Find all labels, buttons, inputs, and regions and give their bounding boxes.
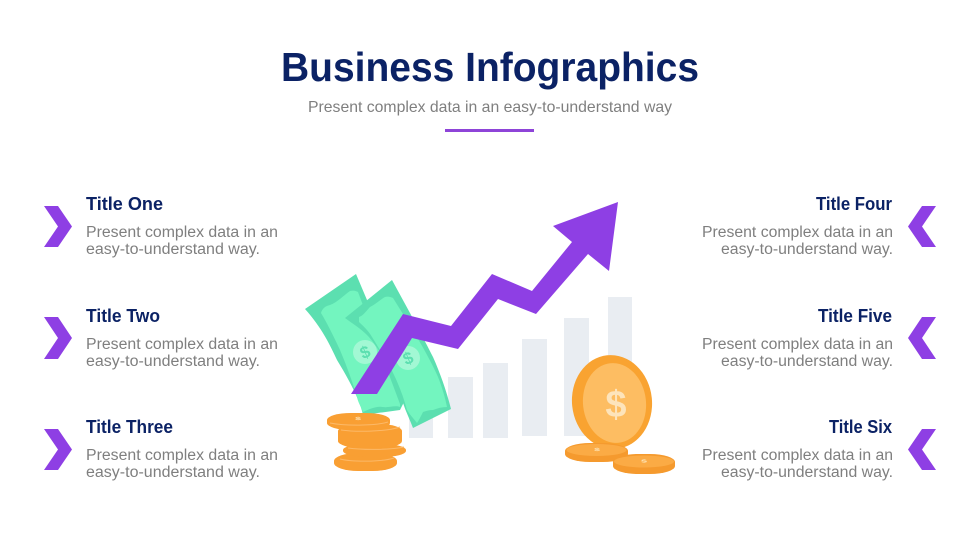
text: description six: easy-to-understand way. — [721, 464, 893, 481]
icon: chevron one — [44, 206, 72, 247]
background bar chart — [409, 297, 632, 438]
heading: title four: Title Four — [816, 194, 892, 214]
icon: chevron two — [44, 317, 72, 359]
second coin — [338, 424, 402, 448]
item: title four — [702, 194, 936, 258]
heading: title two: Title Two — [86, 306, 160, 326]
heading: title one: Title One — [86, 194, 163, 214]
icon: small coin right — [613, 454, 675, 474]
item: title six — [702, 417, 936, 481]
item: title five — [702, 306, 936, 370]
icon: large dollar coin: $ — [605, 384, 627, 426]
icon: small coin right: $ — [641, 459, 648, 464]
icon: large dollar coin — [567, 351, 657, 453]
icon: chevron four — [908, 206, 936, 247]
icon: left coin stack — [327, 413, 406, 471]
rising arrow — [351, 202, 618, 394]
icon: front banknote: $ — [400, 348, 417, 369]
icon: front banknote — [345, 280, 451, 428]
heading: title six: Title Six — [829, 417, 892, 437]
title: Business Infographics — [281, 44, 699, 90]
text: description two: Present complex data in an — [86, 336, 278, 353]
text: description one: Present complex data in an — [86, 224, 278, 241]
central illustration — [305, 202, 675, 474]
item: title one — [44, 194, 278, 258]
text: description four: easy-to-understand way. — [721, 241, 893, 258]
icon: chevron five — [908, 317, 936, 359]
text: description six: Present complex data in an — [702, 447, 893, 464]
heading: title three: Title Three — [86, 417, 173, 437]
icon: small coin left: $ — [594, 447, 601, 452]
subtitle: Present complex data in an easy-to-understand way — [308, 99, 672, 116]
text: description five: easy-to-understand way. — [721, 353, 893, 370]
text: description four: Present complex data in an — [702, 224, 893, 241]
bottom coin — [334, 453, 397, 471]
text: description two: easy-to-understand way. — [86, 353, 260, 370]
text: description five: Present complex data in an — [702, 336, 893, 353]
icon: small coin left — [565, 443, 628, 462]
icon: back banknote: $ — [357, 342, 374, 363]
item: title three — [44, 417, 278, 481]
icon: back banknote — [305, 274, 405, 415]
heading: title five: Title Five — [818, 306, 892, 326]
icon: chevron three — [44, 429, 72, 470]
top coin: $ — [355, 416, 362, 421]
text: description one: easy-to-understand way. — [86, 241, 260, 258]
item: title two — [44, 306, 278, 370]
icon: chevron six — [908, 429, 936, 470]
text: description three: easy-to-understand way. — [86, 464, 260, 481]
title underline — [445, 129, 534, 132]
text: description three: Present complex data in an — [86, 447, 278, 464]
third coin — [343, 444, 406, 457]
